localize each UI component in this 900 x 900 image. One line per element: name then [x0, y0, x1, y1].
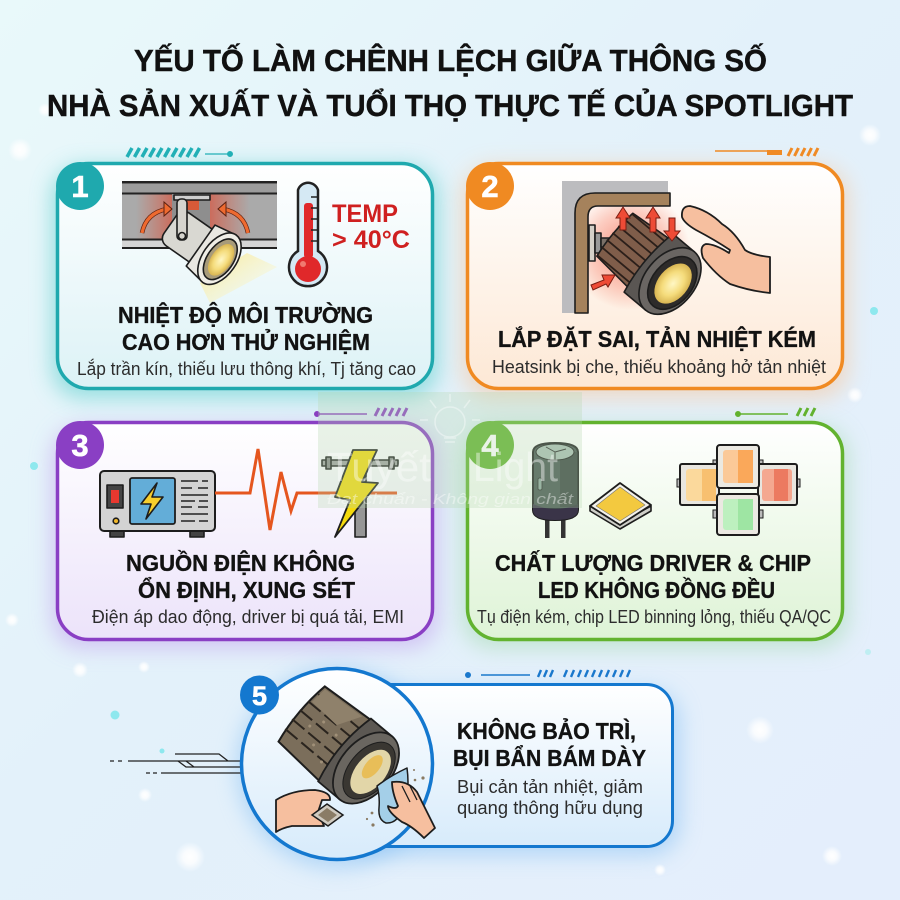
icon: dusty spotlight — [272, 680, 412, 816]
icon: capacitor — [533, 443, 578, 538]
heading 5: BỤI BẨN BÁM DÀY — [453, 744, 646, 771]
badge 4: 4 — [481, 428, 499, 463]
icon: LED chip — [590, 483, 651, 529]
heading 3 — [126, 549, 355, 603]
card 1 frame — [58, 164, 432, 388]
description 5: Bụi cản tản nhiệt, giảm — [457, 777, 643, 797]
decoration: card 5 accent — [465, 670, 630, 678]
badge 1: 1 — [71, 169, 89, 204]
watermark — [318, 392, 582, 508]
badge 4 — [466, 421, 514, 469]
title — [47, 42, 853, 123]
label: temperature: TEMP — [332, 200, 398, 228]
card 3 frame — [58, 422, 432, 640]
circle illustration — [242, 668, 435, 860]
description 2: Heatsink bị che, thiếu khoảng hở tản nhiệt — [492, 357, 826, 377]
description 5: quang thông hữu dụng — [457, 798, 643, 818]
panel: card 1 ambient temperature — [56, 148, 432, 388]
card 5 frame — [330, 684, 672, 846]
badge 5 — [240, 676, 279, 714]
watermark: Đạt chuẩn - Không gian chất — [327, 491, 574, 508]
panel: card 3 unstable power — [56, 408, 432, 640]
heading 1 — [118, 301, 373, 355]
card 4 frame — [468, 422, 842, 640]
decoration: card 3 accent — [314, 408, 407, 416]
badge 2 — [466, 162, 514, 210]
decoration: card 4 accent — [736, 408, 815, 416]
heading 3: ỔN ĐỊNH, XUNG SÉT — [138, 576, 355, 603]
heading 1: NHIỆT ĐỘ MÔI TRƯỜNG — [118, 301, 373, 328]
panel: card 2 wrong installation — [466, 148, 842, 388]
heading 4: CHẤT LƯỢNG DRIVER & CHIP — [495, 549, 811, 576]
heading 4: LED KHÔNG ĐỒNG ĐỀU — [538, 576, 775, 603]
title: YẾU TỐ LÀM CHÊNH LỆCH GIỮA THÔNG SỐ — [134, 42, 767, 78]
icon: hand with cloth — [366, 768, 435, 838]
icon: ceiling spotlight with heat — [122, 181, 277, 303]
panel: card 4 component quality — [466, 408, 842, 640]
label: temperature: > 40°C — [332, 226, 410, 254]
icon: thermometer — [289, 183, 327, 286]
badge 1 — [56, 162, 104, 210]
icon: enclosed heatsink lamp with hand — [562, 181, 770, 326]
description 5 — [457, 777, 643, 818]
heading 5: KHÔNG BẢO TRÌ, — [457, 716, 636, 744]
icon: lightning — [335, 450, 378, 537]
description 3: Điện áp dao động, driver bị quá tải, EMI — [92, 607, 404, 627]
heading 1: CAO HƠN THỬ NGHIỆM — [122, 327, 370, 355]
decoration: circuit lines — [110, 754, 242, 773]
decoration: card 1 accent — [127, 148, 232, 157]
icon: LED binning chips — [677, 445, 800, 535]
description 4: Tụ điện kém, chip LED binning lỏng, thiếu QA/QC — [477, 607, 831, 627]
description 1: Lắp trần kín, thiếu lưu thông khí, Tj tăng cao — [77, 358, 416, 379]
panel: card 5 no maintenance — [240, 668, 672, 860]
heading 5 — [453, 716, 646, 771]
icon: hand holding chip — [276, 790, 343, 832]
heading 3: NGUỒN ĐIỆN KHÔNG — [126, 549, 355, 576]
badge 3 — [56, 421, 104, 469]
card 2 frame — [468, 164, 842, 388]
label: temperature — [332, 200, 410, 254]
decoration: card 2 accent — [715, 148, 818, 156]
chart: voltage surge line — [215, 449, 397, 530]
icon: power supply — [100, 471, 215, 537]
watermark: Light — [473, 444, 559, 490]
arrows: heat flow — [591, 207, 680, 290]
title: NHÀ SẢN XUẤT VÀ TUỔI THỌ THỰC TẾ CỦA SPOTLIGHT — [47, 87, 853, 123]
badge 2: 2 — [481, 169, 499, 204]
badge 3: 3 — [71, 428, 89, 463]
heading 2: LẮP ĐẶT SAI, TẢN NHIỆT KÉM — [498, 324, 816, 352]
heading 4 — [495, 549, 811, 603]
icon: pole — [322, 457, 398, 537]
watermark: Tuyết — [327, 444, 432, 490]
badge 5: 5 — [252, 681, 267, 711]
